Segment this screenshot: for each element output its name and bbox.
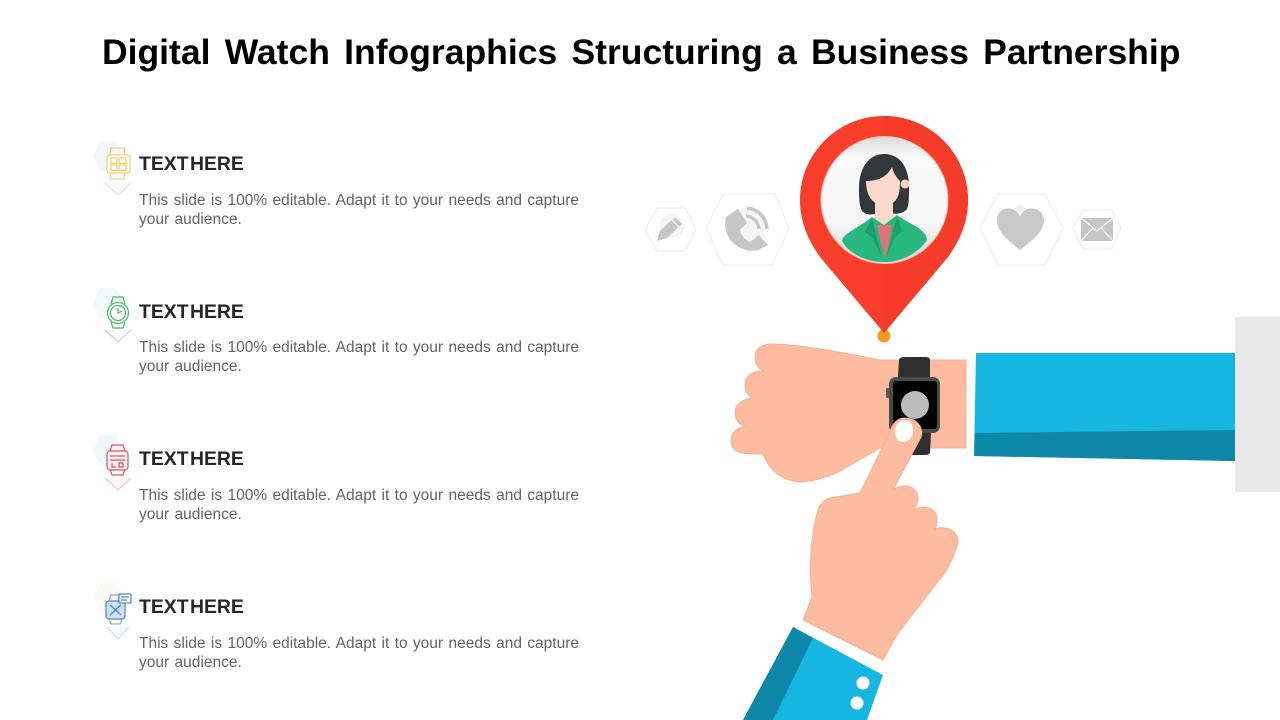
body text: This slide is 100% editable. Adapt it to your needs and capture (139, 192, 579, 209)
icon: smartwatch with app grid (93, 142, 131, 195)
icon: digital watch (93, 435, 131, 490)
location pin (800, 116, 968, 342)
body text: your audience. (139, 506, 242, 523)
pointing hand (803, 418, 958, 660)
smartwatch (886, 357, 940, 455)
list item 3 (93, 435, 579, 523)
heading: TEXT HERE (139, 153, 244, 175)
sleeve shadow (974, 430, 1235, 461)
icon: phone hexagon (706, 194, 789, 265)
body text: This slide is 100% editable. Adapt it to your needs and capture (139, 635, 579, 652)
avatar disc (821, 136, 948, 264)
icon: watch with message bubble (94, 583, 131, 639)
body text: your audience. (139, 358, 242, 375)
watch strap (898, 357, 931, 455)
body text (139, 635, 579, 671)
body text: This slide is 100% editable. Adapt it to your needs and capture (139, 339, 579, 356)
cuff buttons (856, 676, 870, 690)
icon: pencil hexagon (645, 208, 696, 251)
pin body (800, 116, 968, 333)
watch button (901, 391, 929, 419)
shirt cuff (1235, 317, 1280, 492)
body text: your audience. (139, 211, 242, 228)
list item 2 (93, 288, 579, 375)
sleeve shadow (743, 627, 813, 720)
heading: TEXT HERE (139, 301, 244, 323)
watch crown (886, 388, 890, 398)
body text (139, 192, 579, 228)
hand wearing watch (731, 344, 966, 482)
body text: your audience. (139, 654, 242, 671)
avatar: woman (842, 154, 927, 262)
watch screen (893, 381, 937, 429)
icon: analog watch (93, 288, 131, 342)
watch case (889, 377, 940, 433)
right arm sleeve (743, 627, 883, 720)
title: Digital Watch Infographics Structuring a Business Partnership (102, 32, 1180, 72)
heading: TEXT HERE (139, 448, 244, 470)
pin tip dot (878, 330, 890, 342)
icon: heart hexagon (980, 194, 1063, 265)
icon: envelope hexagon (1073, 210, 1121, 249)
body text: This slide is 100% editable. Adapt it to your needs and capture (139, 487, 579, 504)
left arm sleeve (974, 353, 1235, 461)
body text (139, 339, 579, 375)
list item 1 (93, 142, 579, 228)
body text (139, 487, 579, 523)
list item 4 (94, 583, 579, 671)
heading: TEXT HERE (139, 596, 244, 618)
fingernail (893, 418, 915, 444)
